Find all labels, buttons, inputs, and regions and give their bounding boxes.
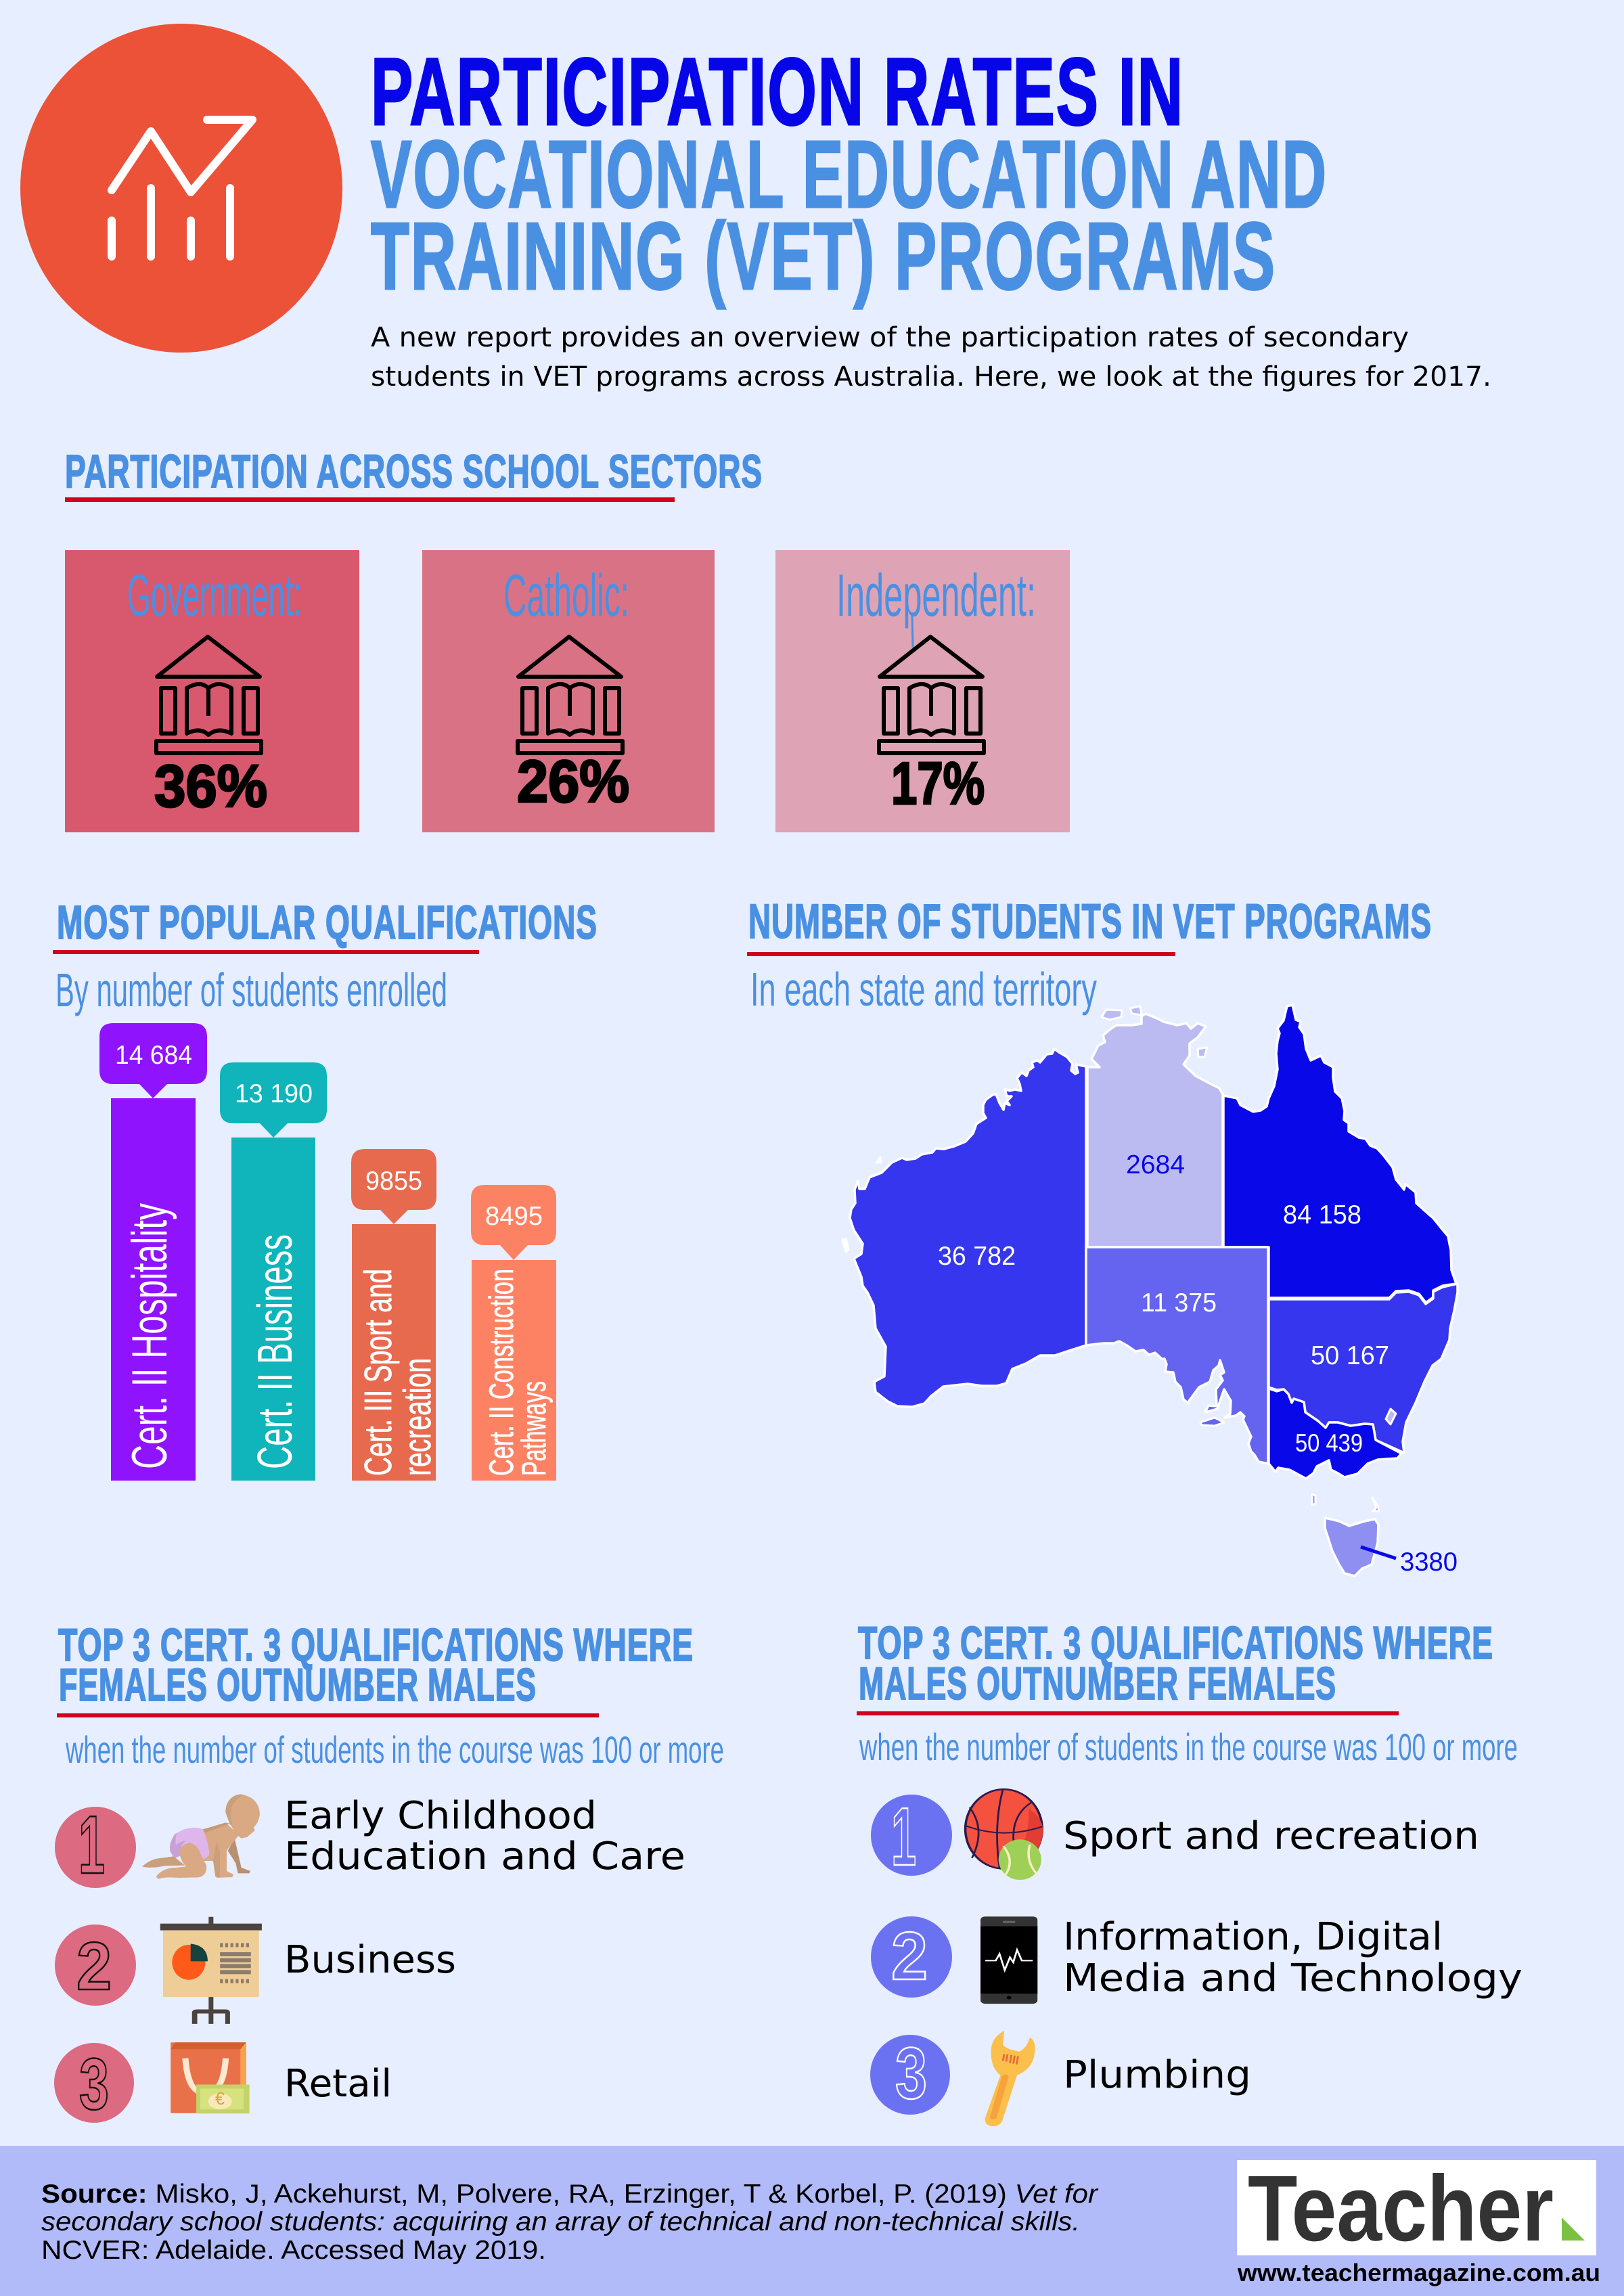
card: Catholic 26%: 26% — [517, 748, 629, 815]
heading: females outnumber males — [57, 1619, 694, 1717]
panel: females outnumber males — [54, 1619, 724, 2125]
card: Government 36% — [65, 550, 359, 832]
heading: school sectors — [65, 445, 763, 502]
bar: Cert. III Sport and recreation: recreation — [396, 1358, 439, 1476]
panel: most popular qualifications — [53, 896, 597, 1481]
state: South Australia — [1086, 1247, 1268, 1464]
bar: Cert. II Hospitality: 14 684 — [115, 1041, 192, 1070]
heading: most popular qualifications: MOST POPULAR QUALIFICATIONS — [57, 896, 597, 949]
item: Business: Business — [284, 1938, 456, 1982]
item: Plumbing — [870, 2031, 1251, 2126]
heading: males outnumber females: MALES OUTNUMBER FEMALES — [859, 1658, 1336, 1709]
icon: presentation board — [160, 1917, 262, 2024]
item: Plumbing: 3 — [895, 2032, 927, 2114]
item: Information, Digital Media and Technology: 2 — [891, 1918, 928, 1994]
item: Early Childhood Education and Care: 1 — [78, 1799, 105, 1891]
intro text: A new report provides an overview of the participation rates of secondary — [371, 322, 1409, 353]
footer band — [0, 2146, 1624, 2296]
subheading: by number of students enrolled: By number of students enrolled — [55, 964, 447, 1016]
intro text — [371, 322, 1491, 392]
source citation — [41, 2180, 1099, 2265]
item: Information, Digital Media and Technology: Information, Digital — [1063, 1915, 1443, 1959]
map labels — [938, 1150, 1458, 1577]
state: Victoria — [1269, 1389, 1401, 1479]
card: Government 36%: Government: — [127, 562, 302, 629]
panel: males outnumber females — [857, 1617, 1522, 2126]
bar: Cert. II Construction Pathways — [471, 1185, 556, 1481]
icon: wrench — [985, 2031, 1035, 2126]
bar: Cert. II Construction Pathways: Cert. II Construction — [482, 1269, 520, 1476]
bar: Cert. II Hospitality: Cert. II Hospitality — [122, 1203, 177, 1469]
item: Information, Digital Media and Technology: Media and Technology — [1063, 1956, 1522, 2000]
item: Early Childhood Education and Care: Education and Care — [284, 1834, 685, 1878]
map: Australia — [842, 1005, 1458, 1576]
item: Retail: Retail — [284, 2062, 392, 2106]
item: Early Childhood Education and Care — [55, 1794, 685, 1891]
source citation: NCVER: Adelaide. Accessed May 2019. — [41, 2236, 546, 2265]
subheading: in each state and territory: In each state and territory — [750, 963, 1097, 1016]
card: Independent 17%: Independent: — [836, 562, 1036, 629]
icon: basketball and tennis ball — [966, 1789, 1043, 1880]
bar: Cert. III Sport and recreation — [351, 1149, 439, 1481]
item: Early Childhood Education and Care: Early Childhood — [284, 1794, 597, 1838]
heading: school sectors: PARTICIPATION ACROSS SCHOOL SECTORS — [65, 445, 763, 497]
item: Business — [55, 1917, 456, 2024]
state: Queensland — [1223, 1005, 1456, 1303]
item: Retail: € — [215, 2088, 225, 2109]
bar: Cert. III Sport and recreation: Cert. III Sport and — [357, 1269, 400, 1476]
map labels: 36 782 — [938, 1242, 1016, 1271]
card: Independent 17% — [775, 550, 1070, 832]
icon: shopping bag with money — [171, 2042, 250, 2113]
item: Sport and recreation — [871, 1789, 1479, 1883]
map labels: 50 167 — [1311, 1341, 1389, 1370]
state: Northern Territory — [1087, 1014, 1223, 1247]
bar: Cert. II Business: Cert. II Business — [248, 1234, 302, 1469]
card: Catholic 26%: Catholic: — [503, 562, 629, 629]
item: Sport and recreation: Sport and recreation — [1063, 1814, 1479, 1858]
subheading: when the number of students: when the number of students in the course was 100 or more — [65, 1728, 724, 1771]
website url: www.teachermagazine.com.au — [1237, 2259, 1600, 2287]
heading: most popular qualifications — [53, 896, 597, 954]
item: Retail — [54, 2042, 392, 2125]
bar: Cert. II Construction Pathways: 8495 — [485, 1202, 543, 1231]
source citation: secondary school students: acquiring an array of technical and non-technical skills. — [41, 2207, 1080, 2236]
intro text: students in VET programs across Australia. Here, we look at the figures for 2017. — [371, 361, 1491, 392]
map labels: 2684 — [1126, 1150, 1185, 1179]
bar: Cert. III Sport and recreation: 9855 — [365, 1167, 422, 1196]
map labels: 84 158 — [1283, 1200, 1361, 1230]
heading: females outnumber males: FEMALES OUTNUMBER MALES — [59, 1659, 537, 1711]
bar: Cert. II Hospitality — [99, 1023, 207, 1481]
bar: Cert. II Business — [220, 1062, 327, 1481]
map labels: 11 375 — [1141, 1288, 1217, 1318]
map labels: 50 439 — [1295, 1429, 1363, 1457]
heading: females outnumber males: TOP 3 CERT. 3 QUALIFICATIONS WHERE — [58, 1619, 694, 1671]
bar: Cert. II Construction Pathways: Pathways — [515, 1381, 553, 1476]
state: Tasmania — [1325, 1518, 1378, 1576]
icon: chart in orange circle — [20, 24, 342, 353]
panel: number of students in VET programs — [747, 895, 1458, 1577]
icon: smartphone with heartbeat — [980, 1916, 1037, 2004]
icon: crawling baby — [142, 1795, 260, 1879]
map labels: 3380 — [1400, 1548, 1458, 1577]
title — [371, 38, 1328, 309]
item: Business: 2 — [76, 1929, 112, 2004]
item: Information, Digital Media and Technology — [871, 1915, 1522, 2004]
item: Sport and recreation: 1 — [891, 1791, 916, 1883]
logo: Teacher: Teacher — [1248, 2157, 1554, 2261]
heading: males outnumber females — [857, 1617, 1493, 1715]
panel: participation across school sectors — [65, 445, 1070, 832]
bar: Cert. II Business: 13 190 — [235, 1079, 313, 1108]
card: Independent 17%: 17% — [891, 750, 985, 817]
title: PARTICIPATION RATES IN — [371, 38, 1184, 145]
leader line: Tasmania — [1361, 1547, 1396, 1558]
card: Government 36%: 36% — [154, 752, 267, 819]
card: Catholic 26% — [422, 550, 715, 832]
source citation: Source: Misko, J, Ackehurst, M, Polvere, RA, Erzinger, T & Korbel, P. (2019) Vet for — [41, 2180, 1099, 2209]
item: Plumbing: Plumbing — [1063, 2053, 1251, 2097]
islands — [842, 1006, 1396, 1511]
state: New South Wales — [1269, 1284, 1458, 1453]
state: Western Australia — [850, 1049, 1086, 1407]
item: Retail: 3 — [79, 2043, 109, 2125]
